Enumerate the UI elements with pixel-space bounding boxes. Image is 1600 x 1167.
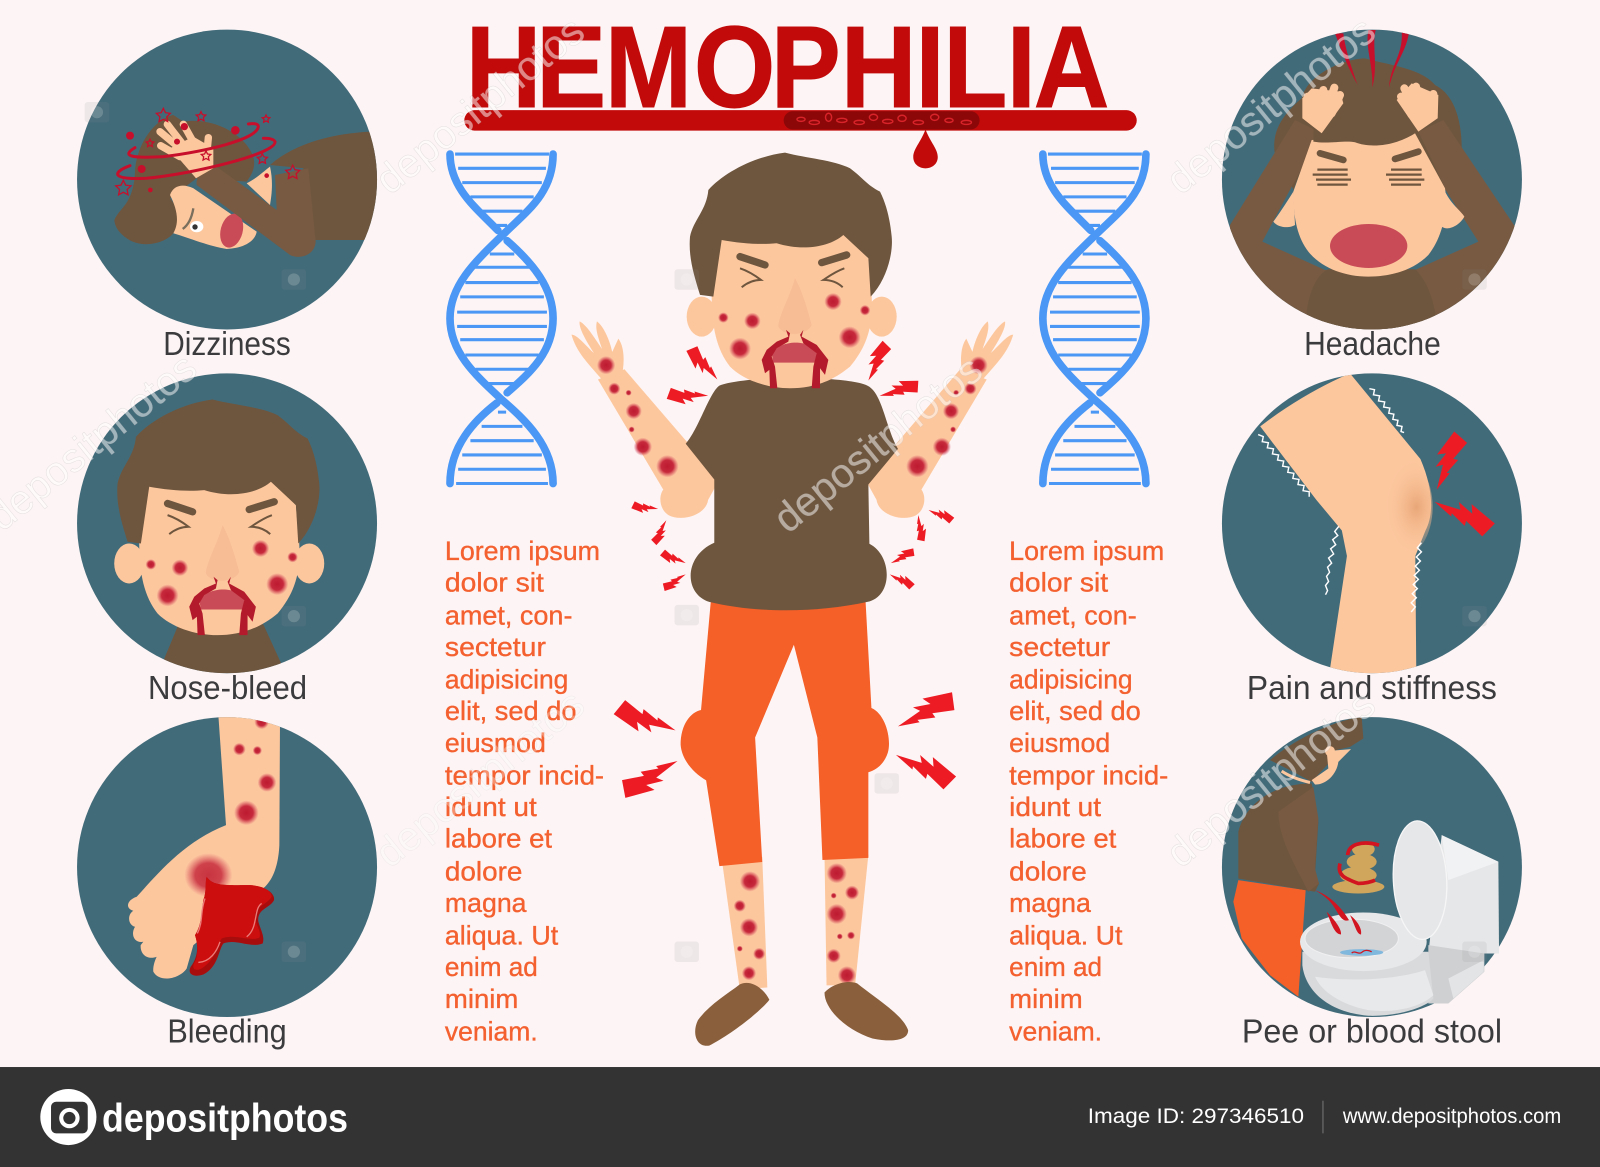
panel: bleeding [77,714,377,1017]
pain bolts [611,339,959,803]
text block: left lorem ipsum: tempor incid- [445,760,604,790]
text block: left lorem ipsum: dolor sit [445,568,545,598]
text block: left lorem ipsum: elit, sed do [445,696,577,726]
watermarks: depositphotos [1157,7,1384,203]
central figure: boy with hemophilia [571,153,1013,1046]
footer logo wordmark: depositphotos [102,1096,348,1140]
text block: left lorem ipsum: amet, con- [445,600,572,630]
panel: pain and stiffness [1222,373,1522,678]
text block: right lorem ipsum: veniam. [1009,1017,1102,1047]
label: Pain and stiffness: Pain and stiffness [1247,670,1497,707]
icon: DNA left [450,154,553,484]
text block: right lorem ipsum: idunt ut [1009,792,1102,822]
panel: nose-bleed [77,373,377,673]
label: Nose-bleed: Nose-bleed [148,670,307,707]
label: Bleeding: Bleeding [167,1014,287,1051]
title bar: blood vessel [464,110,1137,131]
text block: right lorem ipsum: magna [1009,888,1091,918]
panel: pee or blood stool [1222,717,1522,1017]
panel: dizziness [77,30,382,329]
watermarks: depositphotos [367,681,593,876]
text block: left lorem ipsum: sectetur [445,632,546,662]
footer logo icon [40,1089,96,1145]
text block: left lorem ipsum: labore et [445,824,553,854]
text block: left lorem ipsum: minim [445,984,518,1014]
legs [721,855,868,990]
text block: right lorem ipsum: sectetur [1009,632,1110,662]
shoes [695,982,908,1046]
text block: right lorem ipsum: aliqua. Ut [1009,921,1123,951]
watermarks: depositphotos [764,346,991,542]
icon: blood drop [913,130,938,168]
label: Dizziness: Dizziness [163,326,291,363]
footer url: www.depositphotos.com [1342,1104,1561,1128]
text block: left lorem ipsum: Lorem ipsum [445,536,600,566]
title: HEMOPHILIA [466,3,1109,132]
text block: left lorem ipsum [445,536,604,1047]
footer bar [0,1067,1600,1167]
panel: headache [1222,30,1522,335]
text block: right lorem ipsum: minim [1009,984,1083,1014]
text block: right lorem ipsum: tempor incid- [1009,760,1168,790]
text block: right lorem ipsum: dolore [1009,856,1087,886]
footer image id: Image ID: 297346510 [1088,1104,1304,1128]
label: Headache: Headache [1304,326,1441,363]
head [687,153,897,388]
text block: right lorem ipsum: Lorem ipsum [1009,536,1164,566]
trousers [681,597,889,866]
text block: left lorem ipsum: eiusmod [445,728,546,758]
watermarks: depositphotos [367,7,593,203]
text block: left lorem ipsum: dolore [445,856,522,886]
text block: left lorem ipsum: idunt ut [445,792,537,822]
text block: right lorem ipsum: amet, con- [1009,600,1137,630]
text block: right lorem ipsum: eiusmod [1009,728,1110,758]
label: Pee or blood stool: Pee or blood stool [1242,1014,1502,1051]
text block: left lorem ipsum: veniam. [445,1017,538,1047]
text block: left lorem ipsum: magna [445,888,527,918]
text block: right lorem ipsum: dolor sit [1009,568,1109,598]
text block: right lorem ipsum: enim ad [1009,952,1102,982]
watermarks: depositphotos [1157,681,1384,876]
text block: left lorem ipsum: enim ad [445,952,538,982]
text block: right lorem ipsum: elit, sed do [1009,696,1141,726]
text block: right lorem ipsum [1009,536,1168,1047]
text block: right lorem ipsum: labore et [1009,824,1117,854]
shirt [686,378,898,610]
text block: left lorem ipsum: aliqua. Ut [445,921,559,951]
text block: right lorem ipsum: adipisicing [1009,665,1133,695]
text block: left lorem ipsum: adipisicing [445,665,568,695]
watermarks [0,7,1487,962]
arms [571,321,1013,518]
icon: DNA right [1043,154,1146,484]
